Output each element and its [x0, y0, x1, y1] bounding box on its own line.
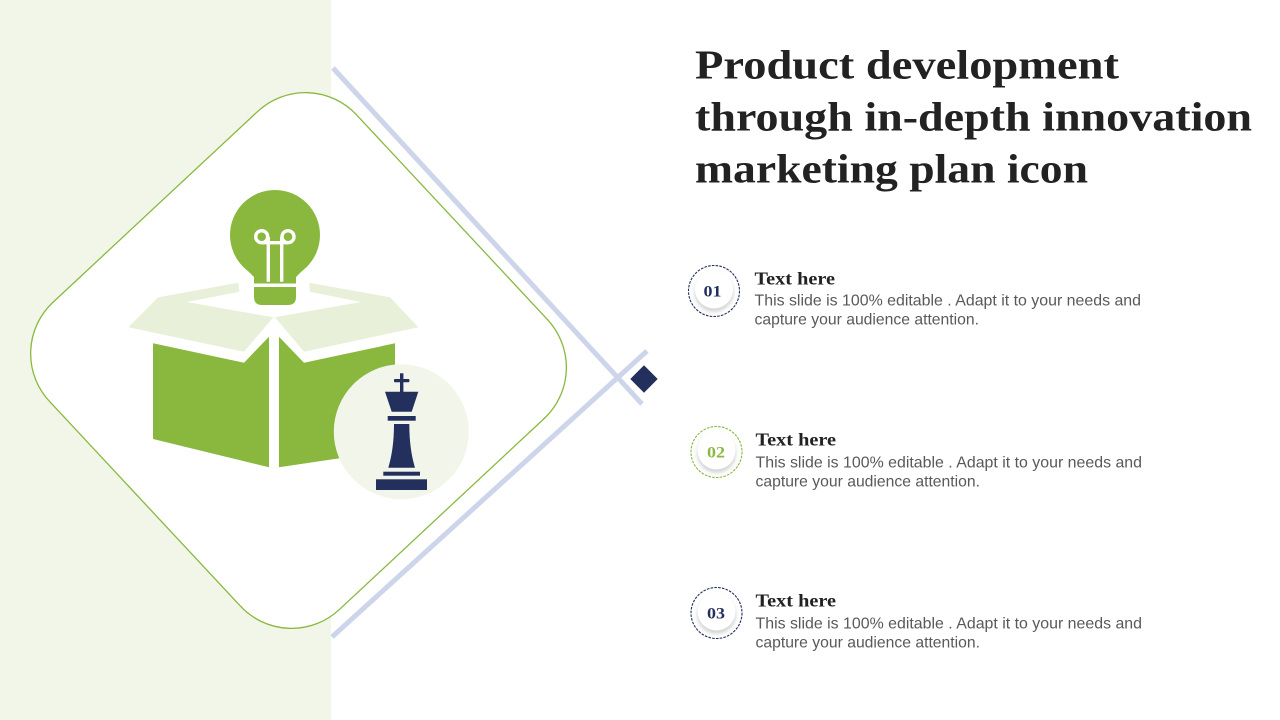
title: through in-depth innovation	[695, 94, 1252, 140]
item 02 body	[756, 454, 1142, 490]
item 03 body	[756, 616, 1142, 652]
item 02 heading: Text here	[756, 430, 836, 450]
badge 02: 02	[707, 444, 725, 462]
connector line: lower diagonal	[332, 351, 647, 637]
badge 03: 03	[707, 606, 725, 622]
item 01 body: capture your audience attention.	[754, 312, 979, 328]
title: marketing plan icon	[695, 146, 1088, 192]
badge 01: 01	[704, 284, 722, 300]
light bulb	[230, 190, 320, 305]
box right face	[279, 337, 395, 467]
box right flap	[275, 283, 418, 352]
item 02 body: capture your audience attention.	[756, 474, 980, 490]
connector line: upper diagonal	[333, 68, 642, 404]
item 01 body	[754, 292, 1141, 328]
icon: open box with light bulb	[128, 190, 418, 467]
item 03 body: capture your audience attention.	[756, 634, 980, 652]
item 03 heading: Text here	[756, 590, 836, 610]
box left flap	[128, 283, 273, 352]
badge 03	[691, 588, 742, 638]
icon: navy diamond marker	[630, 365, 658, 393]
item 03 body: This slide is 100% editable . Adapt it to your needs and	[756, 616, 1142, 632]
box left face	[153, 337, 269, 467]
panel: left tinted background	[0, 0, 331, 720]
item 01 heading: Text here	[754, 268, 835, 288]
item 01 body: This slide is 100% editable . Adapt it to your needs and	[754, 292, 1141, 310]
item 02	[691, 426, 1142, 490]
title: Product development	[695, 42, 1119, 88]
title	[695, 42, 1252, 192]
icon: chess king in pale circle	[334, 364, 469, 499]
item 01	[688, 266, 1141, 328]
badge 02	[691, 426, 742, 478]
panel: rounded diamond frame	[2, 64, 595, 657]
item 03	[691, 588, 1142, 652]
item 02 body: This slide is 100% editable . Adapt it to your needs and	[756, 454, 1142, 472]
badge 01	[688, 266, 740, 316]
